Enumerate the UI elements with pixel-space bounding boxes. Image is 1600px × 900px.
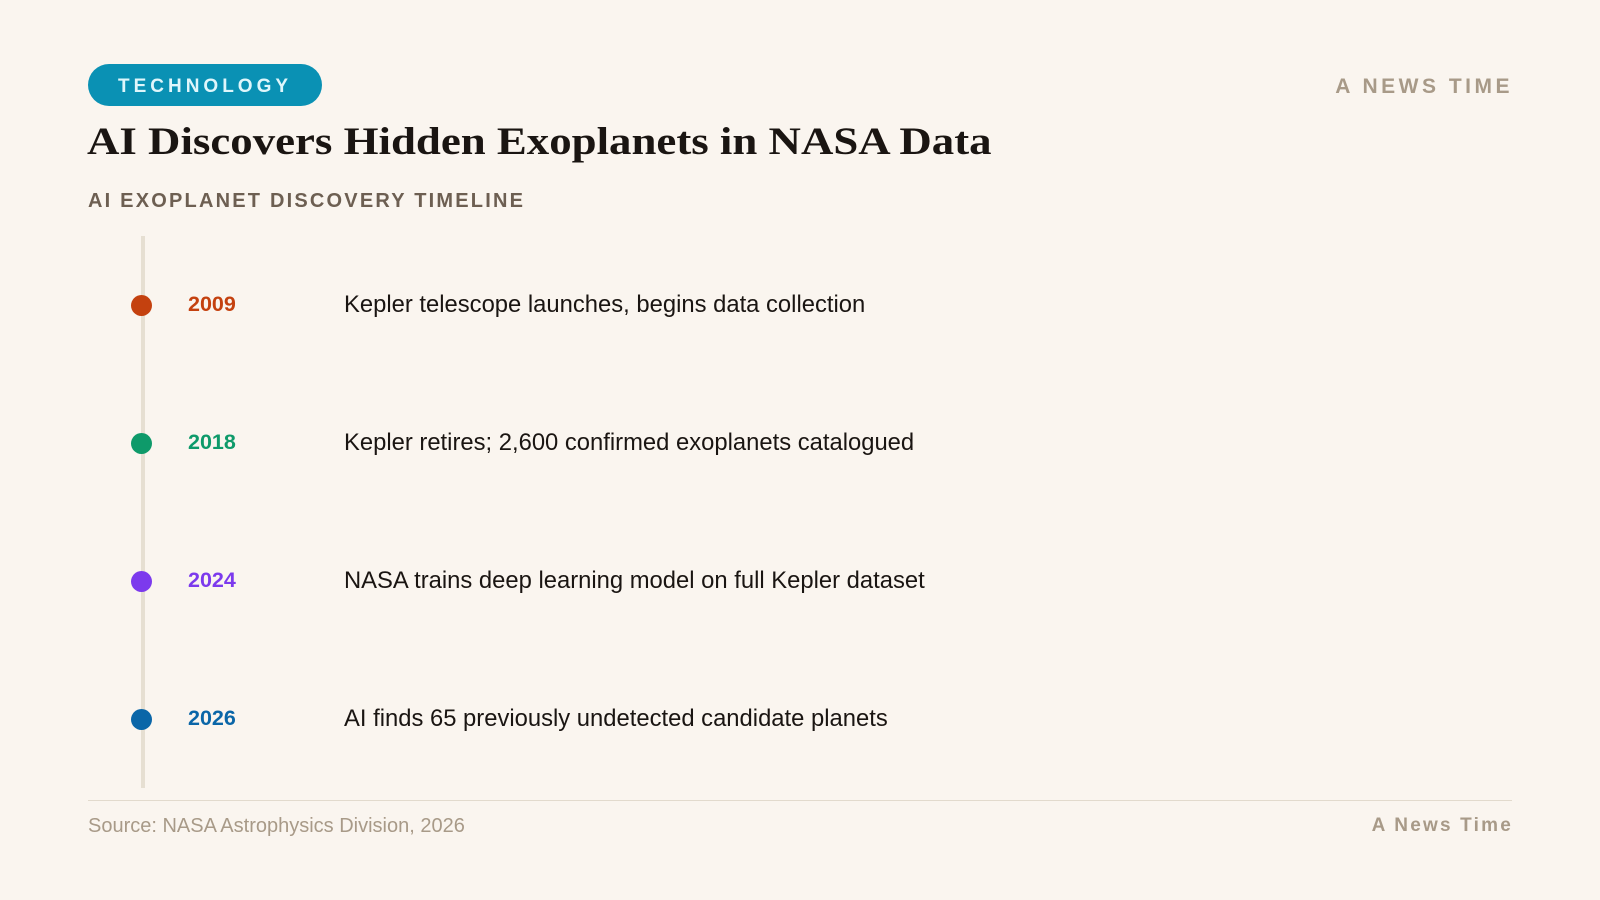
event 2009: Kepler telescope launches, begins data collection [344, 291, 865, 318]
title: AI Discovers Hidden Exoplanets in NASA Data [87, 120, 992, 163]
subtitle: AI EXOPLANET DISCOVERY TIMELINE [88, 190, 525, 212]
event 2018: 2018 [188, 430, 236, 454]
brand top right: A NEWS TIME [1335, 75, 1513, 98]
timeline [131, 236, 925, 788]
event 2026: AI finds 65 previously undetected candidate planets [344, 705, 888, 732]
event 2024: 2024 [188, 568, 236, 592]
source: Source: NASA Astrophysics Division, 2026 [88, 815, 465, 837]
category pill: TECHNOLOGY [118, 76, 292, 97]
footer brand: A News Time [1372, 815, 1513, 836]
event 2024: NASA trains deep learning model on full Kepler dataset [344, 567, 925, 594]
event 2026: 2026 [188, 706, 236, 730]
event 2009: 2009 [188, 292, 236, 316]
category pill [88, 64, 322, 106]
event 2018: Kepler retires; 2,600 confirmed exoplanets catalogued [344, 429, 914, 456]
